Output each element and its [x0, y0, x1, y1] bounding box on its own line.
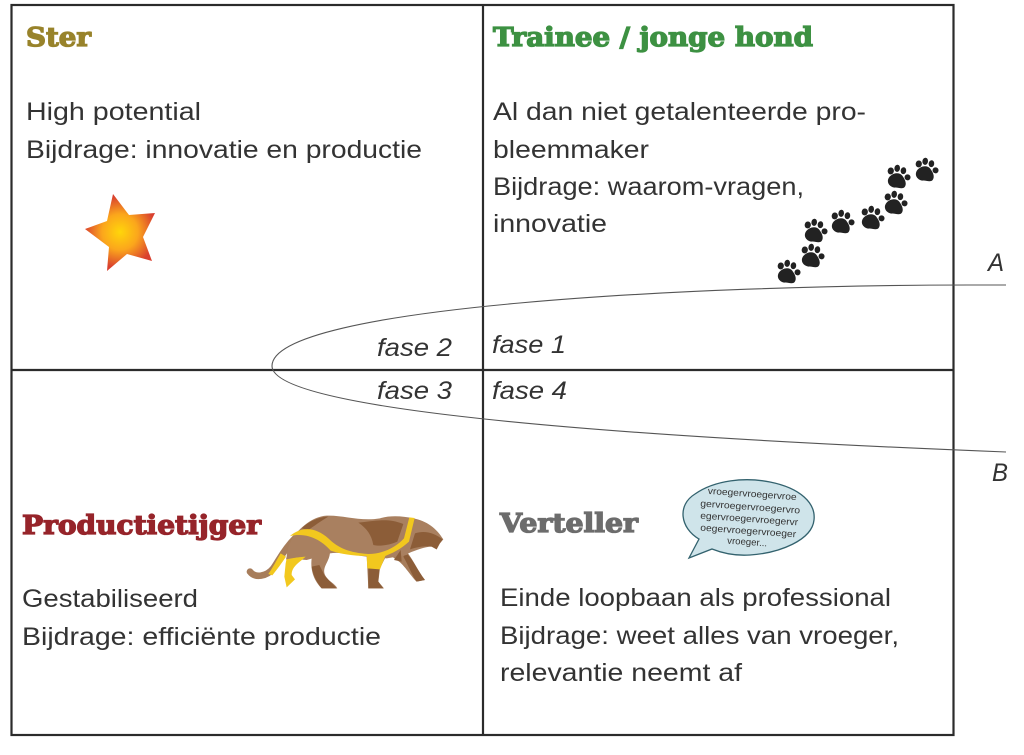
panel: Ster: [26, 23, 422, 271]
icon: star: [85, 194, 155, 271]
heading: Verteller: Verteller: [499, 509, 638, 539]
icon: speech bubble: vroegervroegervroe: [707, 486, 797, 503]
phase labels: fase 3: [377, 377, 452, 405]
text: Trainee description: bleemmaker: [493, 136, 649, 164]
icon: speech bubble: vroeger...: [727, 536, 768, 549]
text: Trainee description: Bijdrage: waarom-vragen,: [493, 173, 804, 201]
curve labels A and B: [986, 249, 1008, 487]
icon: paw prints: [775, 156, 940, 285]
text: Productietijger description: Bijdrage: efficiënte productie: [22, 623, 381, 651]
text: Trainee description: innovatie: [493, 210, 607, 238]
icon: tiger: [250, 516, 443, 588]
text: Trainee description: Al dan niet getalenteerde pro-: [493, 98, 866, 126]
panel: Trainee / jonge hond: [493, 23, 940, 285]
phase labels: fase 2: [377, 334, 452, 362]
heading: Productietijger: Productietijger: [22, 511, 261, 541]
text: Trainee description: [493, 98, 866, 238]
icon: speech bubble: [683, 480, 814, 558]
text: Productietijger description: [22, 585, 381, 651]
text: Verteller description: Bijdrage: weet alles van vroeger,: [500, 622, 899, 650]
text: Verteller description: [500, 584, 899, 687]
panel: Productietijger: [22, 511, 443, 651]
phase labels: [377, 331, 567, 405]
heading: Trainee / jonge hond: Trainee / jonge hond: [493, 23, 813, 53]
curve labels A and B: A: [986, 249, 1004, 277]
icon: speech bubble: oegervroegervroeger: [700, 523, 796, 540]
text: Ster description: High potential: [26, 98, 201, 126]
text: Verteller description: relevantie neemt af: [500, 659, 742, 687]
heading: Ster: Ster: [26, 23, 91, 53]
icon: speech bubble: gervroegervroegervro: [700, 499, 800, 516]
icon: speech bubble: egervroegervroegervr: [700, 511, 798, 528]
phase labels: fase 1: [492, 331, 566, 359]
curve labels A and B: B: [992, 459, 1008, 487]
text: Ster description: [26, 98, 422, 164]
career curve A to B: [272, 285, 1006, 452]
text: Ster description: Bijdrage: innovatie en productie: [26, 136, 422, 164]
text: Productietijger description: Gestabiliseerd: [22, 585, 198, 613]
phase labels: fase 4: [492, 377, 567, 405]
panel: Verteller: [499, 480, 899, 687]
text: Verteller description: Einde loopbaan als professional: [500, 584, 891, 612]
